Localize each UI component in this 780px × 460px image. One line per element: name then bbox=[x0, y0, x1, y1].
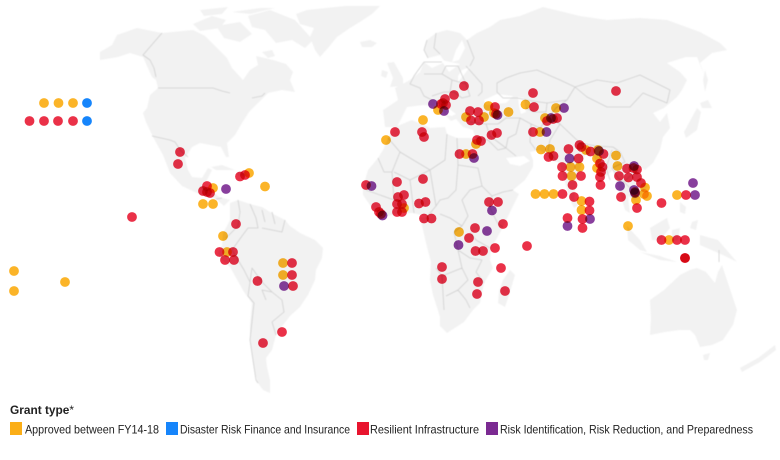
legend item: approved FY14-18: Approved between FY14-18 bbox=[25, 422, 159, 436]
legend bbox=[10, 403, 753, 436]
legend title: Grant type* bbox=[10, 403, 74, 417]
markers: Central and South Asia bbox=[521, 86, 621, 233]
markers: Europe and Middle East bbox=[428, 81, 513, 149]
legend item: resilient infrastructure: Resilient Infrastructure bbox=[370, 422, 479, 436]
world map bbox=[100, 6, 776, 393]
legend item: risk identification: Risk Identification, Risk Reduction, and Preparedness bbox=[500, 422, 753, 436]
markers: Latin America and Caribbean bbox=[173, 147, 298, 348]
markers: Southeast Asia and Pacific bbox=[575, 140, 700, 263]
markers: Pacific small states bbox=[9, 98, 137, 296]
legend item: disaster risk finance: Disaster Risk Finance and Insurance bbox=[180, 422, 350, 436]
markers: Africa bbox=[361, 115, 532, 299]
